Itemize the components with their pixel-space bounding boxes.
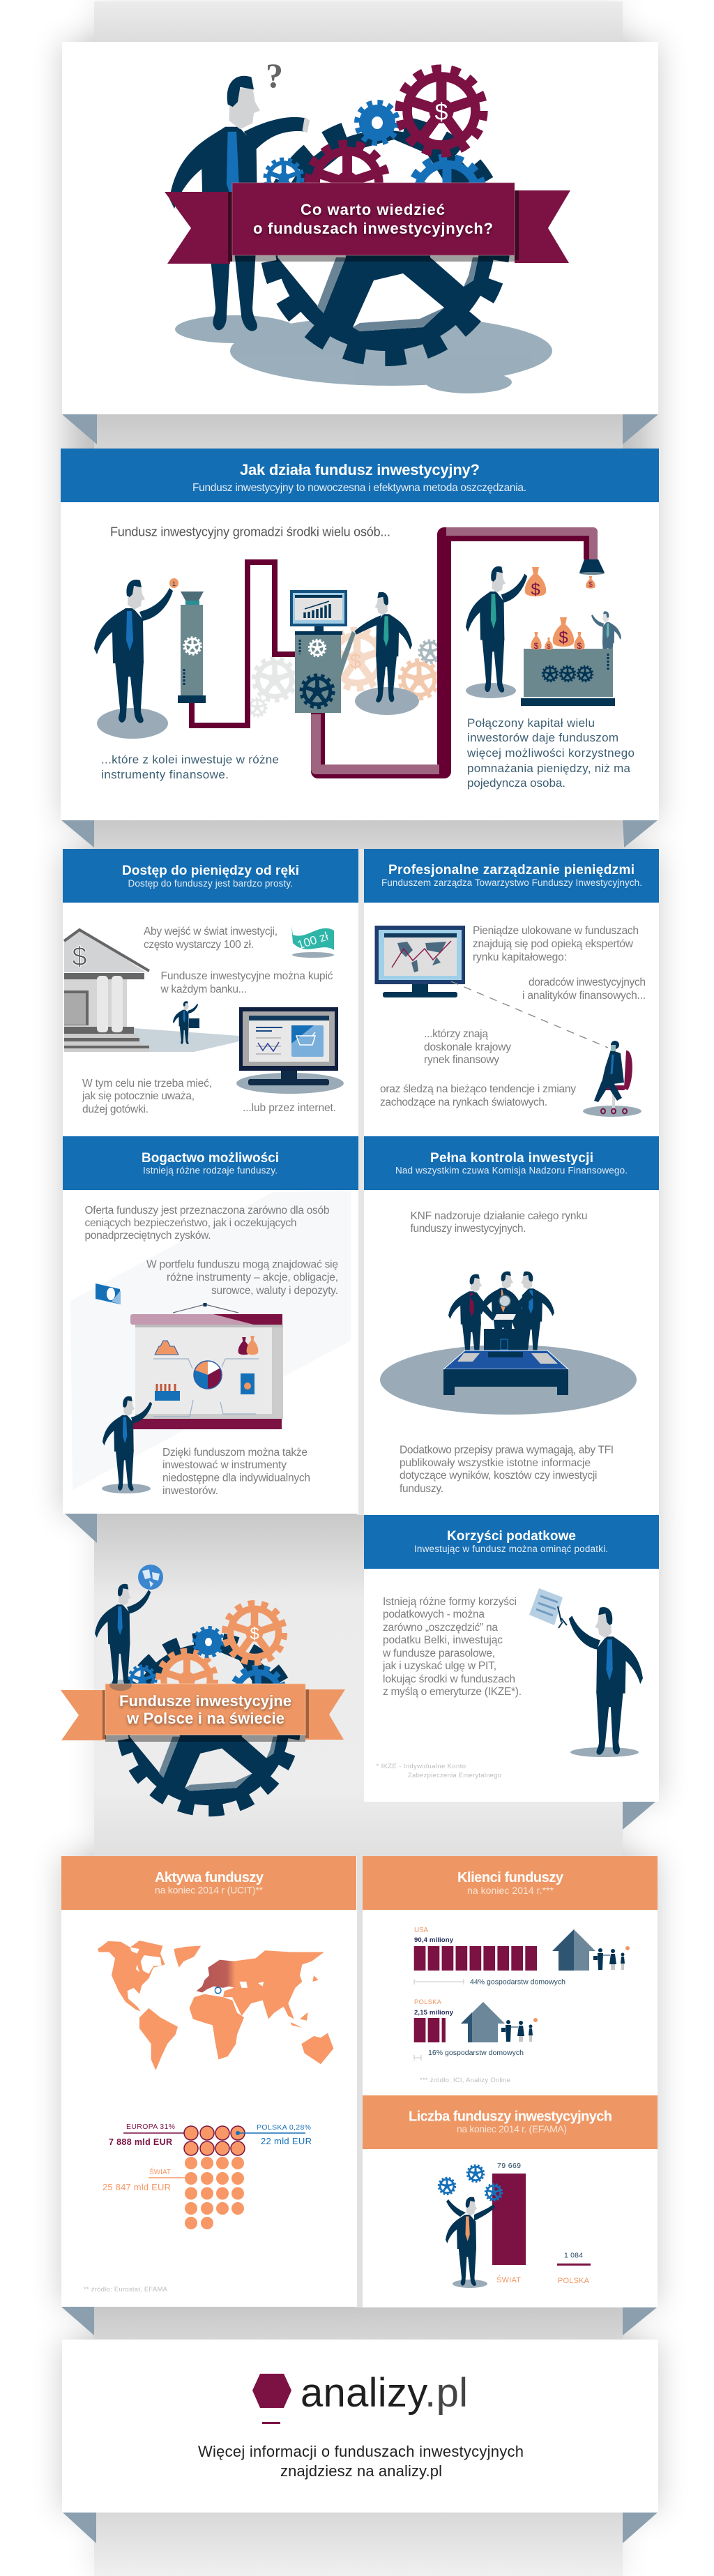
- footnote: [377, 1763, 501, 1779]
- header: Pełna kontrola inwestycji: [430, 1151, 593, 1166]
- texts: ceniących bezpieczeństwo, jak i oczekujących: [85, 1217, 297, 1229]
- bar world: 79 669: [497, 2162, 521, 2170]
- text: combined capital: pomnażania pieniędzy, niż ma: [467, 762, 631, 775]
- big gear: [268, 124, 501, 357]
- header: [363, 1856, 658, 1910]
- text: Istnieją różne formy korzyści: [383, 1596, 517, 1608]
- title: Co warto wiedzieć: [301, 201, 445, 218]
- texts: dużej gotówki.: [82, 1104, 149, 1115]
- texts: surowce, waluty i depozyty.: [211, 1285, 338, 1297]
- USA: 90,4 miliony: [414, 1936, 454, 1944]
- footnote: * IKZE - Indywidualne Konto: [377, 1763, 466, 1770]
- text: znajdziesz na analizy.pl: [280, 2462, 442, 2480]
- pipe thin: [192, 562, 296, 725]
- texts: [380, 925, 646, 1108]
- lamp and falling bag: [579, 559, 605, 589]
- panel: fund assets: [61, 1856, 357, 2307]
- footnote: Zabezpieczenia Emerytalnego: [408, 1772, 501, 1779]
- big gear: [123, 1639, 294, 1810]
- texts: często wystarczy 100 zł.: [144, 939, 254, 951]
- folds under process: [61, 820, 658, 848]
- clerk behind vault: [591, 611, 621, 665]
- investor left: 1: [172, 580, 176, 587]
- fund machine with monitor: [290, 590, 356, 713]
- panel: professional management: [364, 849, 659, 1136]
- text: [198, 2443, 524, 2480]
- texts: jak się potocznie uważa,: [82, 1090, 195, 1102]
- investor right with bag: [466, 566, 546, 698]
- texts: ...lub przez internet.: [243, 1102, 336, 1114]
- text: combined capital: więcej możliwości korzystnego: [466, 746, 635, 760]
- dot chart: [184, 2126, 245, 2229]
- header: Klienci funduszy: [457, 1870, 564, 1885]
- panel: hero card: [62, 42, 658, 414]
- texts: Dzięki funduszom można także: [162, 1447, 307, 1459]
- text: combined capital: Połączony kapitał wielu: [467, 716, 595, 730]
- bar world: [492, 2162, 526, 2284]
- label: Poland: [236, 2123, 312, 2146]
- Poland: POLSKA: [414, 1998, 442, 2006]
- header: na koniec 2014 r. (EFAMA): [457, 2123, 567, 2134]
- folds under footer: [63, 2513, 658, 2543]
- man cutting tax form: [529, 1588, 643, 1757]
- bar Poland: 1 084: [564, 2251, 583, 2259]
- computer: [236, 1007, 344, 1094]
- emblem: funds in Poland and worldwide: [61, 1565, 345, 1810]
- lamp and falling bag: $: [588, 581, 593, 589]
- vault with money bags: $: [559, 628, 568, 647]
- texts: niedostępne dla indywidualnych: [162, 1472, 310, 1484]
- vault with money bags: [521, 617, 615, 706]
- fold under right col: [623, 1802, 655, 1830]
- panel: tax benefits: [364, 1515, 659, 1802]
- juggling man: [439, 2165, 502, 2288]
- faint gears: $: [350, 650, 362, 673]
- presenter: [102, 1396, 152, 1493]
- man with question mark: ?: [266, 56, 283, 95]
- label: Europe: 7 888 mld EUR: [109, 2137, 172, 2147]
- texts: i analityków finansowych...: [522, 990, 646, 1002]
- text: instruments: instrumenty finansowe.: [101, 768, 229, 781]
- texts: Dodatkowo przepisy prawa wymagają, aby TFI: [400, 1444, 614, 1456]
- texts: funduszy.: [400, 1483, 443, 1495]
- label: world: [102, 2167, 186, 2192]
- man with briefcase: [173, 1001, 199, 1044]
- header: Fundusz inwestycyjny to nowoczesna i efektywna metoda oszczędzania.: [192, 482, 526, 494]
- faint gears: €: [415, 674, 423, 689]
- USA: 44% gospodarstw domowych: [470, 1978, 565, 1987]
- oversight scene: [380, 1272, 637, 1415]
- faint gears: [248, 630, 441, 716]
- ground shadows: [175, 315, 552, 393]
- instrument icons: [153, 1336, 259, 1417]
- bar world: ŚWIAT: [496, 2275, 521, 2284]
- Poland: [414, 1998, 538, 2061]
- vault with money bags: $: [577, 641, 582, 651]
- ribbon banner: [165, 183, 570, 264]
- texts: [400, 1210, 614, 1495]
- text: z myślą o emeryturze (IKZE*).: [383, 1686, 522, 1698]
- panel: number of funds: [363, 2095, 658, 2307]
- man with question mark: [169, 56, 310, 331]
- world map: [98, 1941, 333, 2070]
- banknote flag: 100 zł: [296, 929, 330, 952]
- text: [382, 1596, 522, 1698]
- header: [364, 1136, 659, 1190]
- text: lokując środki w funduszach: [383, 1673, 515, 1685]
- texts: KNF nadzoruje działanie całego rynku: [410, 1210, 587, 1222]
- investor right with bag: $: [531, 580, 540, 599]
- header: Korzyści podatkowe: [447, 1529, 576, 1544]
- small gears: $: [435, 99, 448, 126]
- texts: funduszy inwestycyjnych.: [410, 1223, 526, 1235]
- monitor with world chart: [375, 926, 465, 997]
- text: instruments: ...które z kolei inwestuje w różne: [101, 753, 279, 766]
- header: [61, 1856, 356, 1910]
- banknote flag: [291, 926, 334, 958]
- panel: access to money: [63, 849, 358, 1136]
- texts: Aby wejść w świat inwestycji,: [144, 926, 278, 937]
- header: Bogactwo możliwości: [142, 1151, 279, 1166]
- panel: fund clients: [363, 1856, 658, 2095]
- text: podatkowych - można: [383, 1609, 485, 1620]
- label: Europe: EUROPA 31%: [126, 2123, 175, 2131]
- panel: full control: [364, 1136, 659, 1516]
- header: Dostęp do pieniędzy od ręki: [122, 864, 299, 878]
- Poland: 16% gospodarstw domowych: [428, 2049, 524, 2057]
- label: Poland: 22 mld EUR: [261, 2136, 312, 2146]
- bar Poland: POLSKA: [558, 2277, 590, 2285]
- texts: dotyczące wyników, kosztów czy inwestycji: [400, 1470, 597, 1482]
- texts: rynku kapitałowego:: [473, 951, 567, 963]
- vault with money bags: $: [547, 643, 551, 650]
- texts: [82, 926, 336, 1115]
- title: [253, 201, 493, 237]
- investor left: [94, 578, 178, 739]
- texts: oraz śledzą na bieżąco tendencje i zmiany: [380, 1083, 576, 1095]
- label: world: ŚWIAT: [149, 2167, 171, 2176]
- text: jak i uzyskać ulgę w PIT,: [382, 1660, 496, 1672]
- USA: USA: [414, 1927, 428, 1934]
- text: instruments: [101, 753, 279, 781]
- dashed line: [451, 981, 608, 1048]
- emblem title: Fundusze inwestycyjne: [119, 1692, 291, 1710]
- source: *** źródło: ICI, Analizy Online: [420, 2077, 510, 2084]
- header: Profesjonalne zarządzanie pieniędzmi: [388, 863, 635, 878]
- projection screen: [130, 1303, 283, 1429]
- texts: doskonale krajowy: [424, 1041, 511, 1053]
- emblem title: w Polsce i na świecie: [126, 1710, 284, 1727]
- header: [363, 2095, 658, 2149]
- texts: doradców inwestycyjnych: [529, 977, 646, 988]
- text: zarówno „oszczędzić” na: [383, 1622, 498, 1634]
- header: Funduszem zarządza Towarzystwo Funduszy Inwestycyjnych.: [381, 878, 642, 888]
- label: world: 25 847 mld EUR: [102, 2182, 171, 2192]
- header: Liczba funduszy inwestycyjnych: [409, 2109, 612, 2125]
- text: combined capital: inwestorów daje funduszom: [467, 731, 618, 744]
- header: [61, 449, 659, 502]
- projector: [96, 1283, 121, 1304]
- header: Nad wszystkim czuwa Komisja Nadzoru Finansowego.: [395, 1165, 628, 1176]
- texts: publikowały wszystkie istotne informacje: [400, 1457, 591, 1469]
- header: Inwestując w fundusz można ominąć podatki.: [414, 1544, 608, 1554]
- text: intro: Fundusz inwestycyjny gromadzi środki wielu osób...: [110, 525, 390, 538]
- header: [63, 1136, 358, 1190]
- small gears: [129, 1604, 284, 1719]
- texts: inwestorów.: [162, 1485, 218, 1497]
- Poland: 2,15 miliony: [414, 2009, 454, 2017]
- texts: Fundusze inwestycyjne można kupić: [160, 970, 333, 982]
- texts: W tym celu nie trzeba mieć,: [82, 1078, 212, 1090]
- title: o funduszach inwestycyjnych?: [253, 220, 493, 237]
- panel: how a fund works: [61, 449, 659, 820]
- label: Poland: POLSKA 0,28%: [257, 2123, 311, 2132]
- man holding globe: [95, 1565, 163, 1687]
- texts: inwestować w instrumenty: [162, 1459, 287, 1471]
- bank: [64, 929, 239, 1052]
- texts: rynek finansowy: [424, 1054, 499, 1066]
- panel: footer: [62, 2340, 658, 2513]
- texts: Oferta funduszy jest przeznaczona zarówno dla osób: [85, 1205, 329, 1217]
- small gears: $: [250, 1625, 259, 1643]
- logo: [252, 2370, 468, 2424]
- label: Europe: [109, 2123, 185, 2147]
- header: Jak działa fundusz inwestycyjny?: [240, 461, 480, 479]
- pipe thick: [316, 532, 593, 771]
- folds under stats: [61, 2307, 657, 2335]
- header: [364, 849, 659, 903]
- texts: [85, 1205, 338, 1497]
- texts: zachodzące na rynkach światowych.: [380, 1097, 547, 1108]
- header: [63, 849, 358, 903]
- text: Więcej informacji o funduszach inwestycyjnych: [198, 2443, 524, 2460]
- bar Poland: [557, 2251, 591, 2285]
- emblem title: [119, 1692, 291, 1727]
- text: combined capital: [466, 716, 635, 790]
- seated analyst: [583, 1041, 641, 1117]
- texts: ponadprzeciętnych zysków.: [85, 1230, 211, 1242]
- projector beam: [70, 1191, 351, 1490]
- ribbon banner: [61, 1680, 345, 1742]
- header: Dostęp do funduszy jest bardzo prosty.: [128, 878, 293, 889]
- fold under left col: [65, 1514, 97, 1543]
- texts: Pieniądze ulokowane w funduszach: [473, 925, 639, 937]
- header: na koniec 2014 r.***: [467, 1885, 554, 1896]
- texts: ...którzy znają: [424, 1028, 488, 1040]
- panel: wealth of options: [63, 1136, 358, 1514]
- bank: $: [72, 942, 87, 972]
- texts: w każdym banku...: [160, 984, 247, 995]
- header: [364, 1515, 659, 1569]
- texts: W portfelu funduszu mogą znajdować się: [146, 1258, 338, 1271]
- small gears: [266, 69, 483, 230]
- USA: [414, 1927, 630, 1987]
- source: ** źródło: Eurostat, EFAMA: [84, 2286, 168, 2293]
- header: na koniec 2014 r (UCIT)**: [155, 1885, 264, 1896]
- header: Istnieją różne rodzaje funduszy.: [143, 1165, 278, 1176]
- fund manager: [355, 592, 419, 715]
- header: Aktywa funduszy: [155, 1870, 264, 1885]
- text: combined capital: pojedyncza osoba.: [467, 776, 565, 790]
- machine column: [178, 592, 206, 703]
- text: podatku Belki, inwestując: [383, 1634, 503, 1646]
- pie chart: [194, 1361, 222, 1389]
- logo: analizy.pl: [301, 2370, 468, 2416]
- vault with money bags: $: [534, 641, 539, 651]
- text: w fundusze parasolowe,: [382, 1648, 495, 1659]
- texts: różne instrumenty – akcje, obligacje,: [167, 1272, 338, 1283]
- texts: znajdują się pod opieką ekspertów: [473, 938, 634, 950]
- hero folds: [62, 414, 658, 444]
